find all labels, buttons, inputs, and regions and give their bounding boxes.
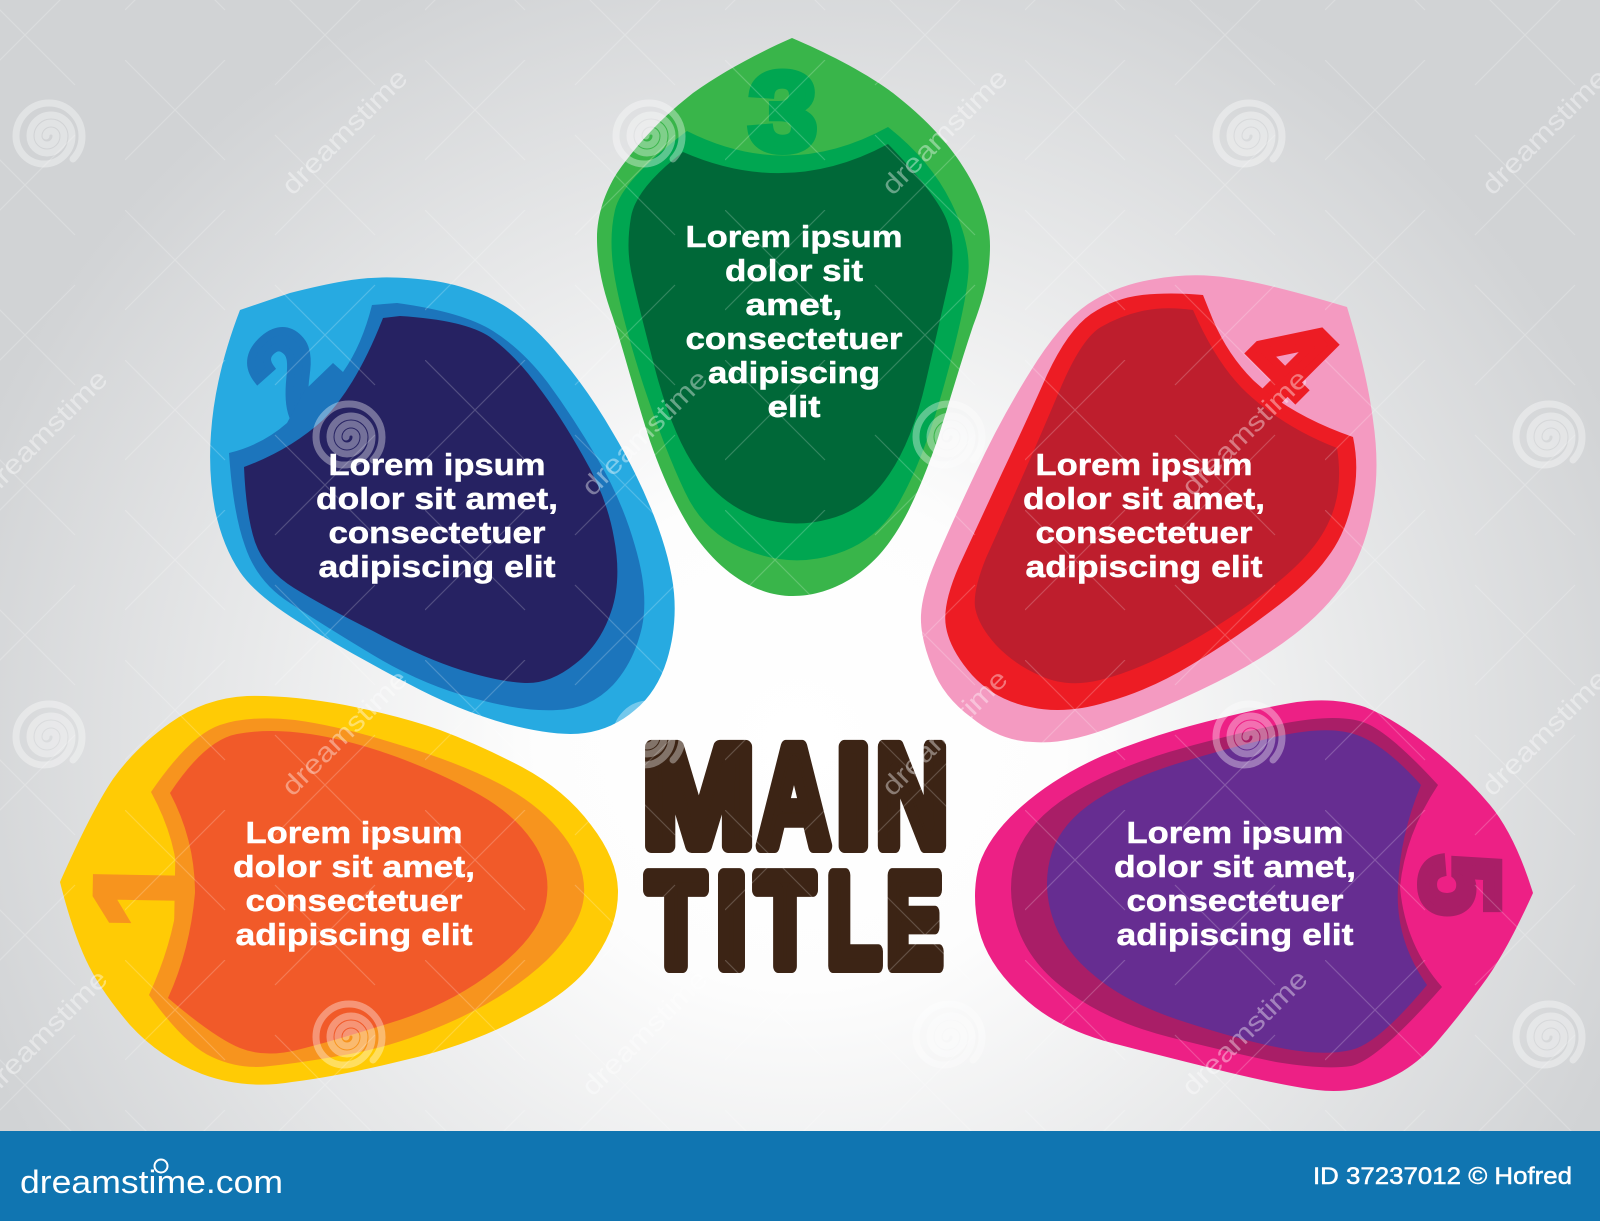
text block: step 1: adipiscing elit bbox=[236, 917, 472, 952]
text block: step 4 bbox=[1023, 447, 1265, 584]
text block: step 2: consectetuer bbox=[328, 515, 546, 550]
text block: step 2: dolor sit amet, bbox=[316, 481, 558, 516]
panel: step 2 blue petal bbox=[210, 277, 675, 734]
footer logo text: dreamstime.com bbox=[20, 1164, 283, 1200]
text block: step 3 bbox=[686, 219, 902, 424]
watermark text: dreamstime bbox=[1176, 364, 1314, 502]
watermark text: dreamstime bbox=[876, 664, 1014, 802]
text block: step 5: Lorem ipsum bbox=[1126, 815, 1344, 850]
text block: step 2: Lorem ipsum bbox=[328, 447, 546, 482]
text block: step 3: elit bbox=[768, 389, 820, 424]
watermark text: dreamstime bbox=[276, 63, 414, 201]
main title: E bbox=[886, 847, 942, 994]
text block: step 5: dolor sit amet, bbox=[1114, 849, 1356, 884]
number 3: 3 bbox=[749, 51, 817, 174]
number 2: 2 bbox=[219, 299, 367, 447]
main title: L bbox=[827, 847, 881, 994]
watermark text: dreamstime bbox=[576, 964, 714, 1102]
number 5: 5 bbox=[1398, 854, 1521, 916]
text block: step 4: consectetuer bbox=[1036, 515, 1252, 550]
watermark text: dreamstime bbox=[1176, 964, 1314, 1102]
main title: N bbox=[876, 716, 948, 877]
watermark swirls bbox=[16, 103, 1582, 1065]
text block: step 3: Lorem ipsum bbox=[686, 219, 902, 254]
text block: step 3: dolor sit bbox=[725, 253, 863, 288]
watermark text: dreamstime bbox=[1476, 664, 1600, 802]
footer image id: ID 37237012 © Hofred bbox=[1313, 1163, 1572, 1190]
number 1: 1 bbox=[64, 851, 223, 931]
main title bbox=[643, 716, 948, 994]
footer bar bbox=[0, 1131, 1600, 1221]
text block: step 5 bbox=[1114, 815, 1356, 952]
panel: step 1 orange petal bbox=[60, 696, 618, 1085]
text block: step 4: adipiscing elit bbox=[1026, 549, 1262, 584]
main title: A bbox=[758, 716, 830, 877]
text block: step 5: adipiscing elit bbox=[1116, 917, 1354, 952]
text block: step 1: Lorem ipsum bbox=[246, 815, 462, 850]
text block: step 1: dolor sit amet, bbox=[233, 849, 475, 884]
main title: I bbox=[716, 847, 746, 994]
main title: T bbox=[647, 847, 705, 994]
watermark text: dreamstime bbox=[876, 63, 1014, 201]
text block: step 2 bbox=[316, 447, 558, 584]
main title: T bbox=[756, 847, 814, 994]
watermark text: dreamstime bbox=[276, 664, 414, 802]
main title: I bbox=[836, 716, 870, 877]
text block: step 3: amet, bbox=[746, 287, 842, 322]
text block: step 1 bbox=[233, 815, 475, 952]
text block: step 3: adipiscing bbox=[708, 355, 880, 390]
watermark text: dreamstime bbox=[576, 364, 714, 502]
text block: step 4: dolor sit amet, bbox=[1023, 481, 1265, 516]
text block: step 2: adipiscing elit bbox=[318, 549, 556, 584]
panel: step 5 magenta petal bbox=[975, 700, 1533, 1091]
text block: step 5: consectetuer bbox=[1126, 883, 1344, 918]
main title: M bbox=[643, 716, 755, 877]
footer logo swirl bbox=[154, 1160, 168, 1172]
watermark text: dreamstime bbox=[1476, 63, 1600, 201]
number 4: 4 bbox=[1218, 288, 1360, 430]
text block: step 3: consectetuer bbox=[686, 321, 902, 356]
text block: step 4: Lorem ipsum bbox=[1036, 447, 1252, 482]
panel: step 4 red petal bbox=[921, 275, 1376, 742]
text block: step 1: consectetuer bbox=[246, 883, 462, 918]
panel: step 3 green petal bbox=[597, 38, 990, 596]
